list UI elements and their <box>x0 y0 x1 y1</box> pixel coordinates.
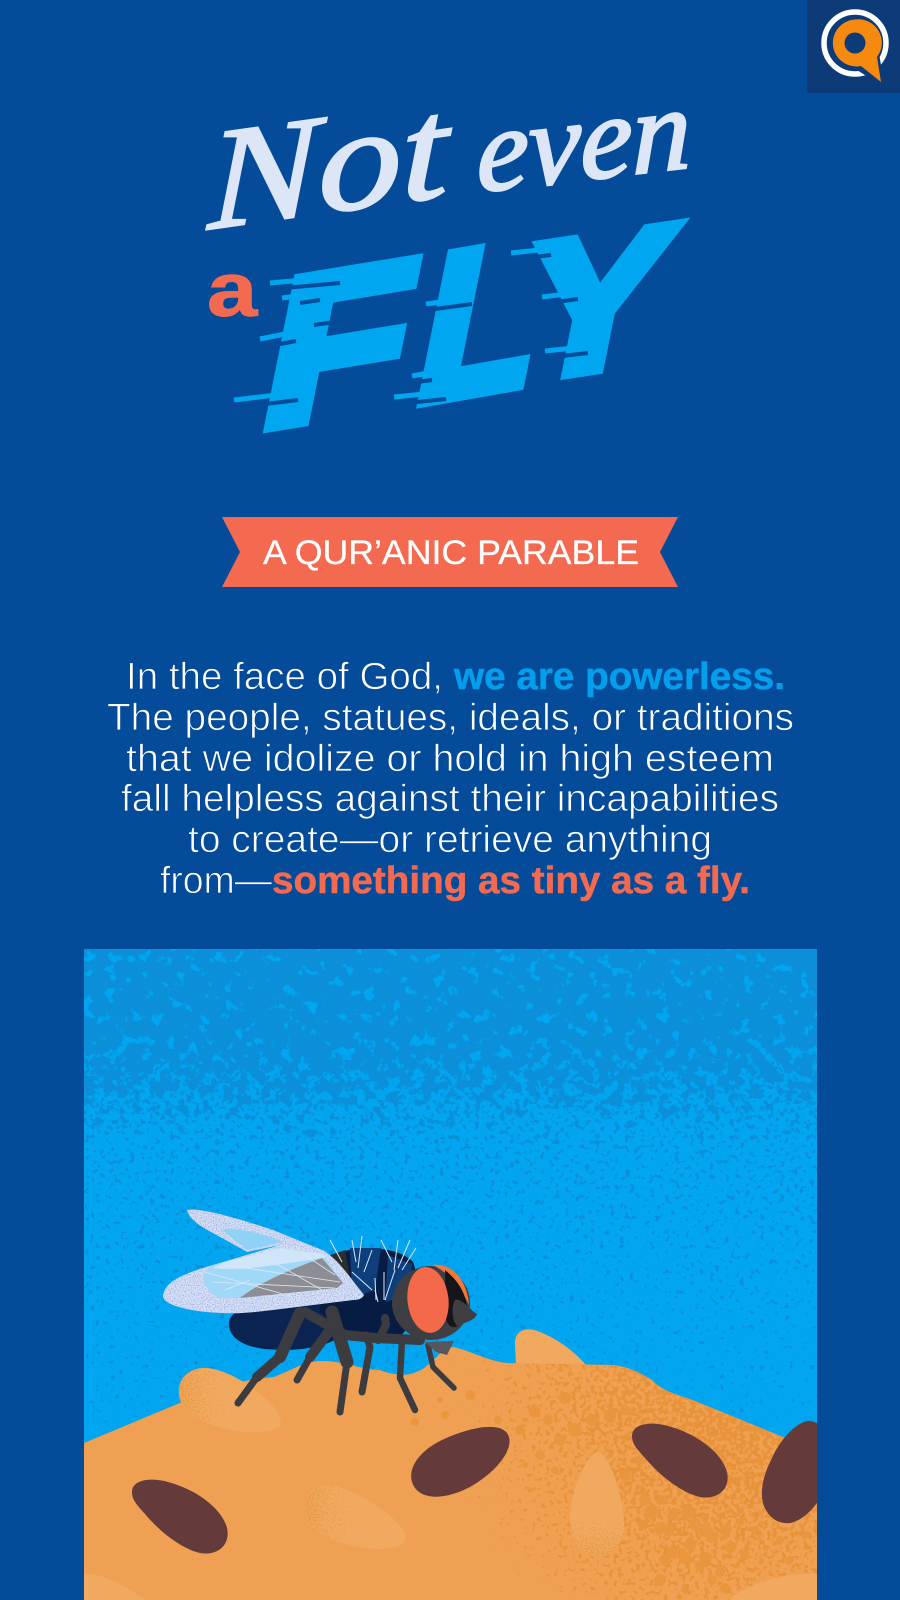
intro paragraph: In the face of God, <box>126 656 443 698</box>
lower wing <box>163 1244 364 1313</box>
logo pin hole <box>844 32 866 54</box>
illustration panel <box>84 949 825 1600</box>
sky dark blob texture <box>84 949 817 1139</box>
almond bump on top edge <box>514 1329 586 1364</box>
lower wing clear membrane <box>203 1257 343 1298</box>
dark almond right <box>632 1424 728 1498</box>
fly <box>163 1210 477 1412</box>
fly thorax <box>320 1248 417 1338</box>
intro paragraph: that we idolize or hold in high esteem <box>126 738 774 780</box>
fly back eye <box>432 1265 469 1305</box>
letters F L Y: L <box>401 191 564 450</box>
thorax black shoulder <box>330 1250 350 1276</box>
wing veins <box>205 1252 340 1296</box>
title: FLY with speed lines <box>234 181 692 475</box>
cookie crumb dots <box>411 1390 809 1594</box>
fly face <box>445 1270 467 1327</box>
sky dot texture <box>84 1060 817 1430</box>
logo white ring <box>824 12 886 74</box>
light almond left bump <box>179 1368 281 1432</box>
title: Not even <box>206 63 691 261</box>
title: Not even: Not <box>206 68 451 261</box>
logo badge <box>807 0 900 93</box>
fly abdomen <box>228 1304 334 1350</box>
ribbon banner <box>222 517 678 587</box>
lower wing grey membrane <box>240 1258 343 1298</box>
dark almond edge <box>762 1421 817 1524</box>
letters F L Y <box>246 181 692 475</box>
cookie body <box>84 1347 817 1600</box>
light almond center <box>305 1485 406 1549</box>
fly head <box>392 1266 470 1340</box>
light almond right <box>570 1452 624 1557</box>
intro paragraph: from— <box>160 860 272 902</box>
cookie <box>84 1329 825 1600</box>
fly antenna <box>453 1300 477 1326</box>
light almond bottom left <box>84 1573 146 1600</box>
logo tail outline <box>858 54 881 82</box>
sky <box>84 949 817 1443</box>
upper wing membrane <box>222 1229 283 1250</box>
thorax blue patches <box>350 1248 381 1298</box>
banner text: A QUR’ANIC PARABLE <box>263 534 639 572</box>
intro paragraph: The people, statues, ideals, or traditions <box>107 697 794 739</box>
upper wing <box>187 1210 327 1252</box>
intro paragraph: fall helpless against their incapabilities <box>121 778 779 820</box>
title <box>206 63 692 475</box>
lower wing light band <box>212 1248 325 1269</box>
cookie crumb speckle <box>440 1345 820 1600</box>
intro paragraph: we are powerless. <box>453 656 785 698</box>
letters F L Y: F <box>246 212 434 475</box>
intro paragraph: to create—or retrieve anything <box>188 819 712 861</box>
title: a: a <box>207 247 258 332</box>
dark almond left <box>132 1480 228 1554</box>
speed lines <box>234 249 583 400</box>
logo orange pin <box>833 19 882 82</box>
light almond bottom right <box>730 1574 817 1600</box>
speed line cuts <box>240 255 588 407</box>
fly legs <box>238 1312 454 1412</box>
letters F L Y: Y <box>500 181 692 426</box>
thorax hairs <box>330 1236 416 1302</box>
fly eye <box>407 1267 449 1333</box>
intro paragraph: something as tiny as a fly. <box>272 860 750 902</box>
intro paragraph <box>107 656 794 902</box>
dark almond center <box>411 1427 510 1497</box>
fly proboscis <box>425 1341 454 1355</box>
title: Not even: even <box>477 63 691 218</box>
